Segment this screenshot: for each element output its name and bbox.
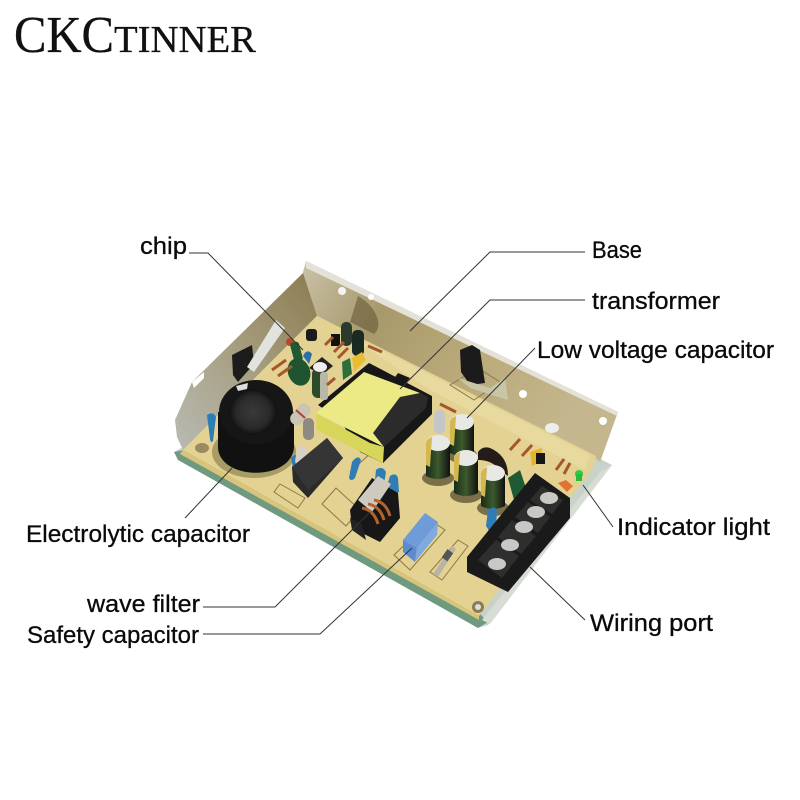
label: wave filter	[86, 512, 370, 618]
left wall	[175, 273, 317, 450]
wiring port	[467, 473, 570, 592]
small components around chip	[195, 322, 382, 453]
resistors and rectifier	[288, 401, 399, 498]
label: Indicator light	[583, 485, 770, 541]
label: transformer: transformer	[592, 288, 720, 315]
label: chip: chip	[140, 233, 187, 260]
indicator light	[558, 470, 583, 492]
wave filter choke	[350, 476, 400, 542]
power supply board	[174, 261, 618, 628]
label: Indicator light: Indicator light	[617, 514, 770, 541]
low voltage capacitors	[422, 410, 526, 532]
logo: TINNER	[114, 19, 257, 61]
traces and silkscreen	[274, 368, 500, 580]
chassis base	[174, 320, 612, 628]
screw	[472, 601, 484, 613]
label: Low voltage capacitor	[467, 337, 774, 418]
electrolytic capacitor large	[212, 380, 296, 478]
safety capacitor	[403, 513, 438, 562]
label: chip	[140, 233, 303, 350]
label: Base: Base	[592, 237, 642, 264]
circuit board	[183, 316, 596, 616]
logo	[14, 7, 257, 64]
label: Low voltage capacitor: Low voltage capacitor	[537, 337, 774, 364]
label: wave filter: wave filter	[86, 591, 200, 618]
fuse	[433, 546, 456, 577]
transformer	[316, 363, 432, 463]
label: Electrolytic capacitor	[26, 468, 250, 548]
label: Safety capacitor	[27, 548, 412, 649]
label: Safety capacitor: Safety capacitor	[27, 622, 199, 649]
label: Wiring port: Wiring port	[590, 610, 713, 637]
label: Electrolytic capacitor: Electrolytic capacitor	[26, 521, 250, 548]
small parts right	[440, 345, 570, 474]
icon: heatsink left	[232, 320, 285, 382]
label: Base	[410, 237, 642, 331]
label: Wiring port	[530, 567, 713, 637]
logo: CKC	[14, 7, 114, 64]
label: transformer	[400, 288, 720, 389]
back wall	[302, 261, 618, 462]
